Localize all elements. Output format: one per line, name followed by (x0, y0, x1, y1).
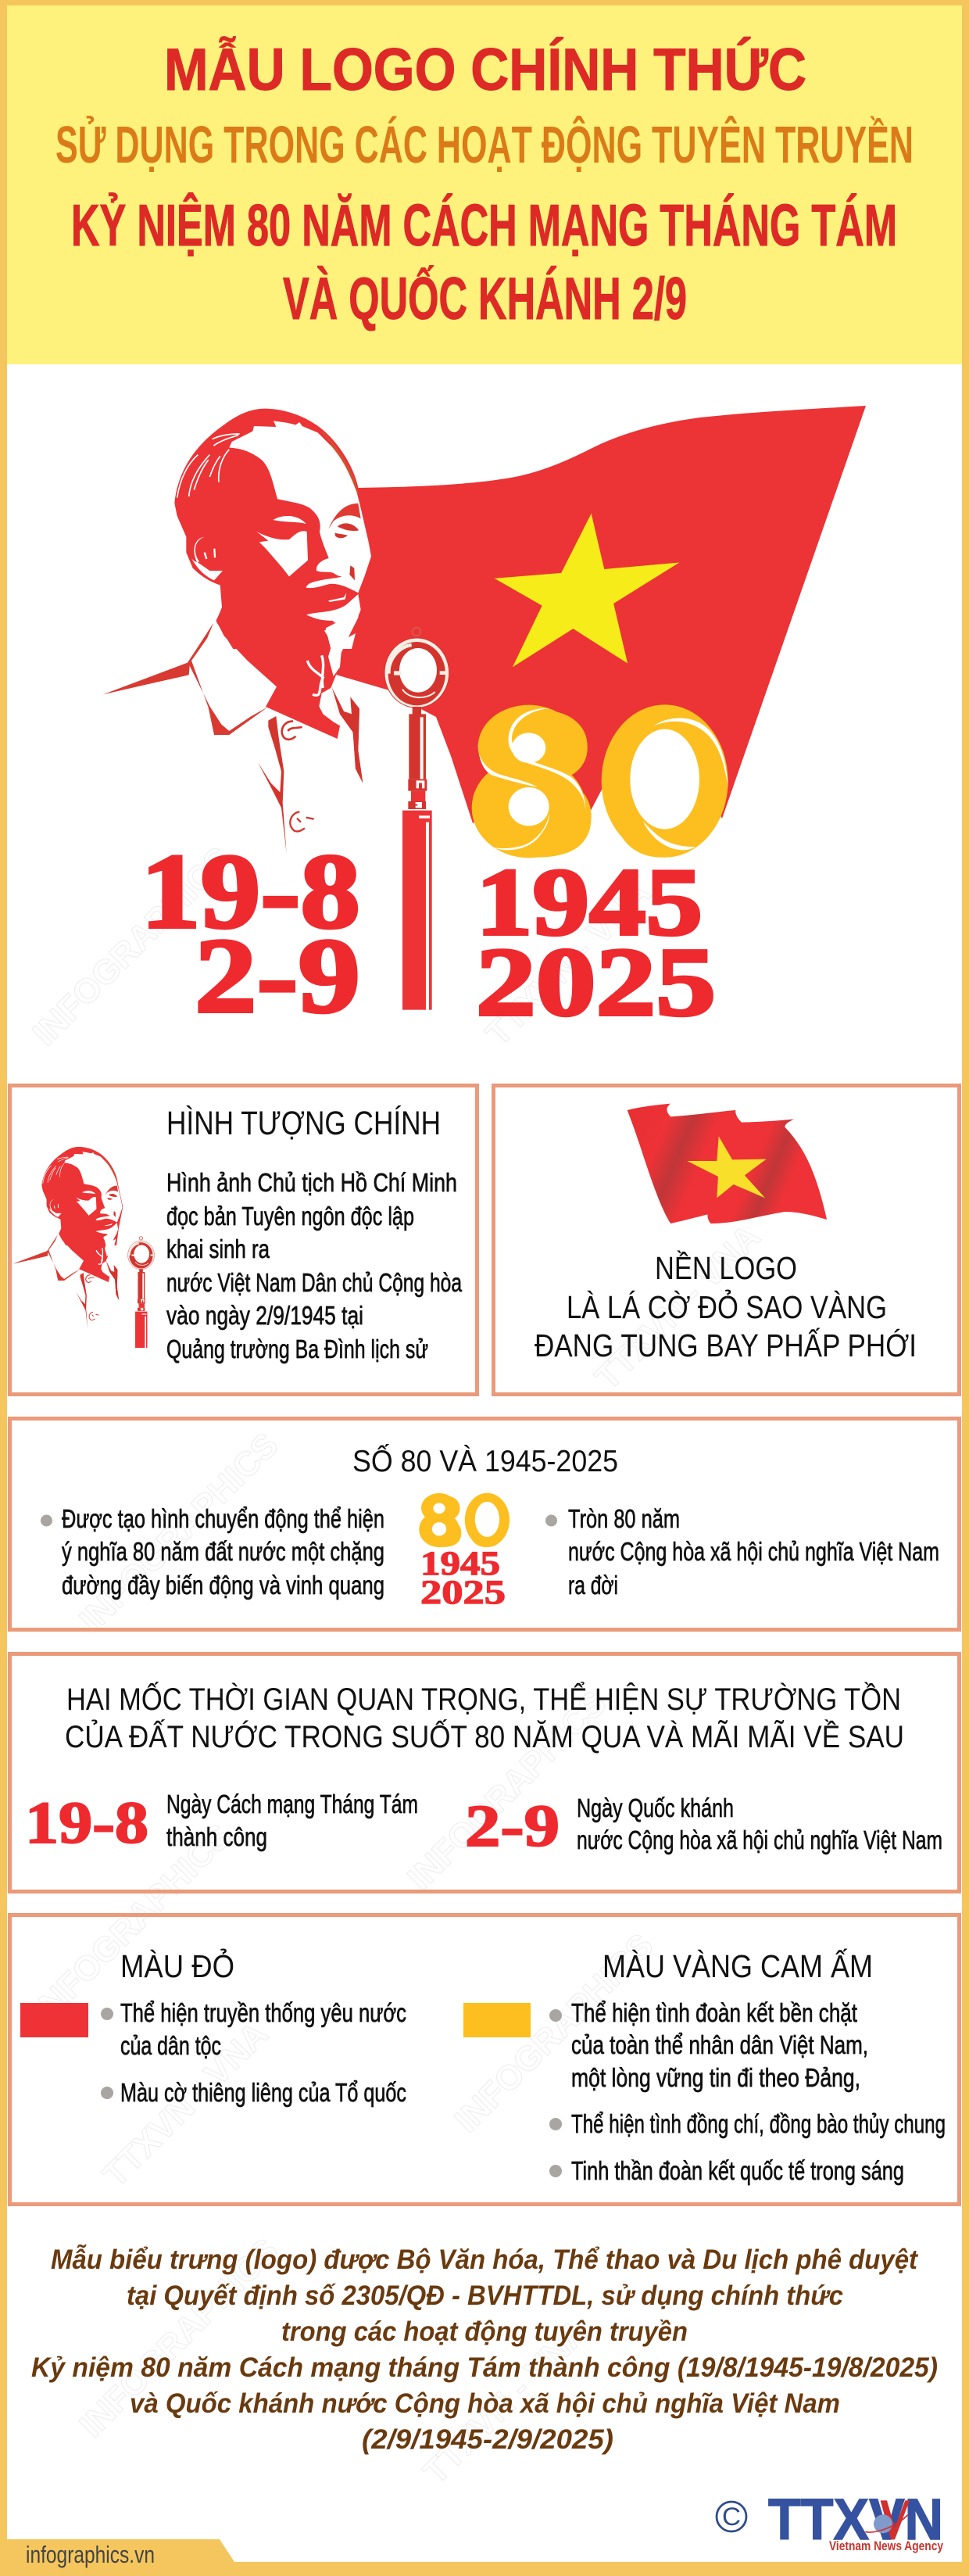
agency logo: TTXVN (768, 2487, 943, 2552)
logo number 80: 80 (473, 660, 727, 903)
closing note: trong các hoạt động tuyên truyền (281, 2316, 688, 2347)
title line 4: VÀ QUỐC KHÁNH 2/9 (283, 266, 687, 332)
text: main figure description (166, 1169, 462, 1364)
text: logo background: NỀN LOGO (655, 1250, 797, 1286)
text: main figure description: nước Việt Nam Dân chủ Cộng hòa (166, 1269, 462, 1298)
date 2-9: 2-9 (465, 1793, 560, 1859)
text: yellow meaning 1: Thể hiện tình đoàn kết bền chặt (571, 1999, 858, 2028)
text: red meaning 1 (120, 1999, 406, 2061)
heading: milestones (65, 1680, 904, 1754)
text: yellow meaning 1: của toàn thể nhân dân Việt Nam, (571, 2031, 868, 2060)
heading: red: MÀU ĐỎ (120, 1948, 234, 1984)
text: 2-9 (577, 1794, 942, 1855)
text: red meaning 2: Màu cờ thiêng liêng của Tổ quốc (120, 2079, 406, 2108)
small logo numbers: 80 (420, 1478, 509, 1564)
logo date 19-8: 19-8 (141, 832, 360, 951)
watermarks: INFOGRAPHICS (25, 840, 239, 1053)
bullet (549, 2009, 562, 2022)
closing note: tại Quyết định số 2305/QĐ - BVHTTDL, sử dụng chính thức (127, 2280, 843, 2311)
bullet (41, 1515, 52, 1526)
closing note: và Quốc khánh nước Cộng hòa xã hội chủ nghĩa Việt Nam (130, 2388, 840, 2419)
date 19-8: 19-8 (25, 1790, 148, 1856)
swatch: warm orange-yellow (463, 2003, 531, 2037)
panel border (9, 1085, 477, 1395)
agency logo: Vietnam News Agency (829, 2538, 943, 2553)
text: red meaning 1: Thể hiện truyền thống yêu nước (120, 1999, 406, 2028)
watermarks: INFOGRAPHICS (72, 2231, 286, 2445)
text: logo background: LÀ LÁ CỜ ĐỎ SAO VÀNG (567, 1289, 887, 1325)
bullet (545, 1515, 557, 1526)
watermarks: TTXVN - VNA (416, 2312, 595, 2492)
text: yellow meaning 1 (571, 1999, 868, 2093)
header banner (7, 5, 962, 364)
panel: colours (9, 1915, 960, 2205)
icon: copyright (717, 2502, 746, 2531)
panel: two milestones (9, 1654, 960, 1892)
watermarks: TTXVN - VNA (478, 873, 658, 1053)
watermarks: TTXVN - VNA (588, 1217, 767, 1397)
text: 19-8 (166, 1790, 418, 1852)
panel: logo background (494, 1085, 960, 1395)
text: logo background: ĐANG TUNG BAY PHẤP PHỚI (535, 1327, 917, 1363)
text: right description: ra đời (568, 1571, 618, 1600)
text: right description: Tròn 80 năm (568, 1505, 680, 1534)
portrait and microphone (103, 409, 449, 1010)
logo year 1945: 1945 (476, 848, 703, 955)
text: 19-8: thành công (166, 1823, 267, 1852)
watermarks: INFOGRAPHICS (400, 1684, 614, 1897)
text: left description: Được tạo hình chuyển động thể hiện (62, 1505, 384, 1534)
panel: main figure (9, 1085, 477, 1395)
icon: copyright: C (722, 2503, 741, 2531)
watermarks: TTXVN - VNA (95, 2015, 275, 2194)
heading: warm orange-yellow: MÀU VÀNG CAM ẤM (602, 1948, 873, 1984)
logo date 2-9: 2-9 (195, 916, 360, 1035)
closing note: Kỷ niệm 80 năm Cách mạng tháng Tám thành công (19/8/1945-19/8/2025) (31, 2352, 938, 2383)
text: 19-8: Ngày Cách mạng Tháng Tám (166, 1790, 418, 1819)
logo star (495, 514, 679, 667)
text: left description: đường đầy biến động và vinh quang (62, 1571, 384, 1600)
bullet (101, 2008, 113, 2020)
small logo numbers (419, 1478, 510, 1611)
heading: main figure: HÌNH TƯỢNG CHÍNH (166, 1105, 441, 1142)
footer tab (0, 2539, 969, 2576)
text: main figure description: vào ngày 2/9/1945 tại (166, 1302, 363, 1331)
text: main figure description: đọc bản Tuyên ngôn độc lập (166, 1202, 414, 1231)
text: 2-9: Ngày Quốc khánh (577, 1794, 734, 1823)
text: right description (568, 1505, 939, 1600)
small logo numbers: 2025 (420, 1575, 506, 1611)
bullet (101, 2087, 113, 2099)
text: main figure description: Quảng trường Ba Đình lịch sử (166, 1335, 428, 1364)
watermarks (25, 840, 767, 2492)
icon: small portrait (13, 1147, 164, 1395)
text: yellow meaning 1: một lòng vững tin đi theo Đảng, (571, 2064, 860, 2093)
heading: number 80: SỐ 80 VÀ 1945-2025 (352, 1443, 618, 1478)
text: left description (62, 1505, 384, 1600)
watermarks: INFOGRAPHICS (25, 1817, 239, 2030)
logo flag (336, 406, 866, 823)
panel: number 80 and years (9, 1418, 960, 1629)
watermarks: INFOGRAPHICS (447, 1926, 661, 2140)
text: red meaning 1: của dân tộc (120, 2032, 221, 2061)
title line 1: MẪU LOGO CHÍNH THỨC (164, 36, 806, 103)
small logo numbers: 1945 (420, 1546, 500, 1582)
text: main figure description: Hình ảnh Chủ tịch Hồ Chí Minh (166, 1169, 457, 1198)
text: main figure description: khai sinh ra (166, 1235, 270, 1264)
closing note: (2/9/1945-2/9/2025) (362, 2424, 613, 2455)
icon: waving flag (628, 1104, 827, 1224)
text: logo background (535, 1250, 917, 1363)
closing note: Mẫu biểu trưng (logo) được Bộ Văn hóa, Thể thao và Du lịch phê duyệt (51, 2245, 918, 2275)
bullet (549, 2118, 562, 2130)
source url: infographics.vn (26, 2541, 155, 2568)
watermarks: INFOGRAPHICS (72, 1426, 286, 1639)
bullet (549, 2165, 562, 2177)
logo year 2025: 2025 (476, 929, 716, 1037)
closing note (31, 2245, 938, 2455)
swatch: red (20, 2003, 88, 2037)
main logo (103, 406, 866, 1037)
text: left description: ý nghĩa 80 năm đất nước một chặng (62, 1538, 384, 1567)
